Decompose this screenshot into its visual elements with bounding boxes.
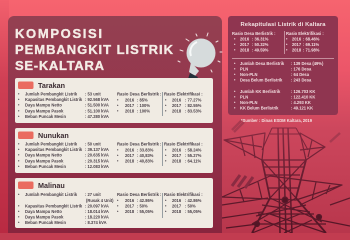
- text block: Tarakan village ratio: Rasio Desa Berlistrik :: [117, 92, 161, 96]
- text block: Tarakan electrification ratio: : 82.55%: [185, 103, 202, 108]
- text block: recap villages: Non-PLN: [240, 72, 258, 77]
- text block: recap village ratio: : 36.31%: [252, 36, 269, 42]
- text block: Tarakan stats: Daya Mampu Netto: [25, 103, 62, 108]
- panel: Malinau: [15, 178, 213, 228]
- text block: Nunukan village ratio: 2016: [125, 148, 135, 152]
- text block: Malinau stats: Daya Mampu Pasok: [25, 214, 64, 220]
- text block: Nunukan stats: : 50 unit: [85, 142, 101, 146]
- text block: Nunukan stats: : 20.315 kVA: [85, 158, 109, 163]
- text block: recap households: •: [234, 94, 236, 100]
- text block: Malinau electrification ratio: 2016: [172, 198, 182, 203]
- text block: Tarakan stats: : 51.100 kVA: [85, 108, 109, 113]
- text block: Malinau village ratio: : 55,05%: [137, 209, 154, 214]
- text block: Malinau stats: (Rusak 4 Unit): [86, 198, 114, 203]
- text block: Tarakan village ratio: 2018: [125, 108, 135, 114]
- text block: Malinau village ratio: •: [117, 204, 119, 208]
- text block: Tarakan stats: Beban Puncak Mesin: [25, 114, 66, 119]
- text block: Nunukan stats: Kapasitas Pembangkit Listrik: [25, 147, 83, 152]
- text block: Nunukan electrification ratio: Rasio Elektrifikasi :: [164, 142, 203, 146]
- text block: recap electrification ratio: Rasio Elektrifikasi :: [286, 31, 324, 36]
- text block: recap households: Jumlah KK Berlistrik: [240, 89, 281, 94]
- text block: recap electrification ratio: [286, 31, 324, 52]
- icon: Malinau badge: [18, 182, 34, 189]
- text block: Nunukan village ratio: : 33.83%: [137, 148, 154, 152]
- icon: Tarakan badge: [18, 82, 34, 89]
- text block: recap villages: : 64 Desa: [291, 72, 310, 77]
- text block: Malinau stats: : 20.097 kVA: [85, 204, 109, 208]
- title: PEMBANGKIT LISTRIK: [15, 42, 174, 57]
- text block: Tarakan stats: •: [18, 114, 20, 119]
- text block: recap villages: •: [234, 72, 236, 77]
- text block: Tarakan electrification ratio: 2016: [172, 98, 182, 102]
- text block: Nunukan village ratio: [117, 142, 161, 164]
- text block: recap village ratio: •: [234, 48, 236, 52]
- text block: Tarakan electrification ratio: •: [165, 103, 167, 108]
- text block: Malinau village ratio: : 42.86%: [137, 198, 154, 203]
- text block: Tarakan stats: : 92.568 kVA: [85, 97, 109, 102]
- text block: recap villages: Jumlah Desa Berlistrik: [240, 61, 285, 66]
- text block: recap villages: PLN: [240, 66, 248, 72]
- text block: Nunukan stats: : 12.083 kVA: [85, 164, 109, 169]
- panel: Tarakan: [15, 78, 213, 123]
- text block: Nunukan village ratio: •: [117, 158, 119, 164]
- panel: recap: [228, 16, 338, 115]
- heading: Nunukan: Nunukan: [38, 131, 69, 140]
- text block: Malinau stats: : 27 unit: [85, 192, 101, 197]
- text block: Nunukan village ratio: •: [117, 153, 119, 158]
- text block: recap electrification ratio: 2018: [292, 48, 302, 52]
- text block: Nunukan village ratio: 2018: [125, 158, 135, 164]
- text block: Nunukan stats: Jumlah Pembangkit Listrik: [25, 142, 78, 146]
- text block: Malinau stats: [18, 192, 114, 225]
- text block: Nunukan village ratio: 2017: [125, 153, 135, 158]
- text block: Nunukan electrification ratio: 2016: [172, 148, 182, 152]
- text block: recap households: KK Belum Berlistrik: [240, 106, 279, 110]
- text block: Malinau stats: •: [18, 192, 20, 197]
- text block: Nunukan village ratio: Rasio Desa Berlistrik :: [117, 142, 161, 146]
- text block: recap electrification ratio: : 69.11%: [303, 42, 320, 47]
- text block: Malinau village ratio: 2017: [125, 204, 135, 208]
- heading: Tarakan: Tarakan: [38, 81, 65, 90]
- title: SE-KALTARA: [15, 58, 105, 73]
- text block: recap villages: : 139 Desa (49%): [291, 61, 324, 66]
- text block: recap electrification ratio: : 68.46%: [303, 36, 320, 42]
- text block: Nunukan stats: •: [18, 147, 20, 152]
- text block: Malinau stats: : 8.374 kVA: [85, 220, 107, 225]
- text block: Tarakan stats: Kapasitas Pembangkit Listrik: [25, 97, 83, 102]
- text block: Malinau village ratio: : 50%: [137, 204, 148, 208]
- text block: Nunukan electrification ratio: : 55.27%: [185, 153, 202, 158]
- text block: Tarakan stats: [18, 92, 109, 119]
- text block: Nunukan electrification ratio: 2017: [172, 153, 182, 158]
- text block: Tarakan village ratio: : 100%: [137, 103, 150, 108]
- text block: recap households: : 126.703 KK: [291, 89, 315, 94]
- text block: Nunukan stats: Daya Mampu Netto: [25, 153, 62, 158]
- text block: Nunukan stats: Beban Puncak Mesin: [25, 164, 66, 169]
- text block: Malinau village ratio: Rasio Desa Berlistrik :: [117, 192, 161, 197]
- heading: recap: Rekapitulasi Listrik di Kaltara: [240, 22, 326, 28]
- text block: Malinau electrification ratio: 2017: [172, 204, 182, 208]
- text block: Malinau stats: Kapasitas Pembangkit Listrik: [25, 204, 83, 208]
- text block: recap electrification ratio: : 71.98%: [303, 48, 320, 52]
- text block: Tarakan village ratio: 2017: [125, 103, 135, 108]
- text block: Nunukan stats: •: [18, 158, 20, 163]
- text block: Tarakan stats: •: [18, 103, 20, 108]
- text block: recap households: •: [234, 100, 236, 105]
- text block: recap villages: [234, 61, 324, 82]
- text block: Malinau village ratio: 2016: [125, 198, 135, 203]
- title: KOMPOSISI: [15, 26, 102, 41]
- text block: Malinau electrification ratio: [164, 192, 203, 214]
- text block: recap households: PLN: [240, 94, 248, 100]
- text block: Nunukan electrification ratio: •: [165, 153, 167, 158]
- text block: recap households: Non-PLN: [240, 100, 258, 105]
- text block: Tarakan village ratio: : 100%: [137, 108, 150, 114]
- text block: Tarakan electrification ratio: 2018: [172, 108, 182, 114]
- text block: Nunukan village ratio: •: [117, 148, 119, 152]
- text block: Malinau stats: •: [18, 220, 20, 225]
- text block: recap households: [234, 89, 315, 110]
- text block: Nunukan stats: : 20.635 kVA: [85, 153, 109, 158]
- text block: recap electrification ratio: 2017: [292, 42, 302, 47]
- text block: recap households: •: [234, 106, 236, 110]
- text block: Tarakan electrification ratio: Rasio Elektrifikasi :: [164, 92, 203, 96]
- text block: recap households: : 122.410 KK: [291, 94, 315, 100]
- text block: recap village ratio: 2017: [240, 42, 250, 47]
- text block: Nunukan stats: •: [18, 164, 20, 169]
- text block: recap village ratio: : 50.32%: [252, 42, 269, 47]
- text block: Malinau electrification ratio: •: [165, 198, 167, 203]
- text block: Malinau electrification ratio: : 55,05%: [185, 209, 202, 214]
- text block: Malinau stats: Daya Mampu Netto: [25, 209, 62, 214]
- text block: Malinau electrification ratio: •: [165, 209, 167, 214]
- text block: Tarakan village ratio: •: [117, 108, 119, 114]
- text block: Tarakan stats: •: [18, 92, 20, 96]
- text block: Tarakan village ratio: •: [117, 103, 119, 108]
- panel: Nunukan: [15, 128, 213, 173]
- text block: recap village ratio: : 49.59%: [252, 48, 269, 52]
- text block: Nunukan electrification ratio: : 58.24%: [185, 148, 202, 152]
- text block: recap electrification ratio: •: [286, 48, 288, 52]
- text block: Nunukan village ratio: : 40,83%: [137, 158, 154, 164]
- text block: Nunukan stats: [18, 142, 109, 169]
- text block: Tarakan village ratio: : 85%: [137, 98, 148, 102]
- text block: recap villages: •: [234, 61, 236, 66]
- text block: Nunukan electrification ratio: •: [165, 148, 167, 152]
- text block: recap electrification ratio: •: [286, 36, 288, 42]
- panel: main composition: [8, 16, 222, 240]
- text block: Malinau electrification ratio: : 50%: [185, 204, 196, 208]
- text block: Malinau stats: : 18.220 kVA: [85, 214, 109, 220]
- text block: Nunukan electrification ratio: : 64.11%: [185, 158, 202, 164]
- text block: Nunukan village ratio: : 40,83%: [137, 153, 154, 158]
- text block: Malinau stats: •: [18, 209, 20, 214]
- text block: recap villages: •: [234, 78, 236, 82]
- text block: Tarakan electrification ratio: •: [165, 108, 167, 114]
- text block: Nunukan stats: •: [18, 142, 20, 146]
- text block: recap electrification ratio: •: [286, 42, 288, 47]
- text block: Tarakan stats: •: [18, 97, 20, 102]
- text block: Nunukan electrification ratio: [164, 142, 203, 164]
- text block: recap households: : 49.121 KK: [291, 106, 313, 110]
- text block: Nunukan electrification ratio: •: [165, 158, 167, 164]
- source note: *Sumber : Dinas ESDM Kaltara, 2019: [241, 118, 313, 123]
- text block: Tarakan electrification ratio: •: [165, 98, 167, 102]
- text block: recap electrification ratio: 2016: [292, 36, 302, 42]
- text block: Malinau village ratio: [117, 192, 161, 214]
- heading: Malinau: Malinau: [38, 181, 65, 190]
- text block: recap village ratio: •: [234, 36, 236, 42]
- text block: Tarakan village ratio: [117, 92, 161, 114]
- text block: Malinau electrification ratio: •: [165, 204, 167, 208]
- text block: Tarakan stats: Jumlah Pembangkit Listrik: [25, 92, 78, 96]
- text block: Nunukan stats: Daya Mampu Pasok: [25, 158, 64, 163]
- text block: recap village ratio: [232, 31, 275, 52]
- text block: Malinau stats: : 18.014 kVA: [85, 209, 109, 214]
- text block: Malinau electrification ratio: : 42.86%: [185, 198, 202, 203]
- text block: Tarakan stats: Daya Mampu Pasok: [25, 108, 64, 113]
- text block: recap village ratio: 2016: [240, 36, 250, 42]
- text block: Tarakan stats: : 51.500 kVA: [85, 103, 109, 108]
- text block: recap village ratio: •: [234, 42, 236, 47]
- text block: Nunukan stats: : 39.137 kVA: [85, 147, 109, 152]
- text block: Malinau stats: Beban Puncak Mesin: [25, 220, 66, 225]
- text block: Malinau village ratio: •: [117, 209, 119, 214]
- text block: Tarakan electrification ratio: [164, 92, 203, 114]
- text block: recap villages: Desa Belum Berlistrik: [240, 78, 283, 82]
- text block: Malinau electrification ratio: 2018: [172, 209, 182, 214]
- text block: Malinau stats: •: [18, 214, 20, 220]
- text block: Nunukan electrification ratio: 2018: [172, 158, 182, 164]
- text block: Malinau stats: •: [18, 204, 20, 208]
- icon: Nunukan badge: [18, 132, 34, 139]
- text block: recap households: : 4.293 KK: [291, 100, 311, 105]
- text block: Malinau village ratio: •: [117, 198, 119, 203]
- icon: transmission tower: [222, 120, 350, 233]
- text block: Tarakan electrification ratio: : 77.27%: [185, 98, 202, 102]
- text block: recap villages: : 176 Desa: [291, 66, 312, 72]
- title: [15, 26, 174, 73]
- text block: recap villages: •: [234, 66, 236, 72]
- text block: Tarakan electrification ratio: : 83.53%: [185, 108, 202, 114]
- text block: Tarakan village ratio: 2016: [125, 98, 135, 102]
- text block: Nunukan stats: •: [18, 153, 20, 158]
- text block: Tarakan village ratio: •: [117, 98, 119, 102]
- text block: Tarakan stats: •: [18, 108, 20, 113]
- text block: recap village ratio: Rasio Desa Berlistrik :: [232, 31, 275, 36]
- text block: Tarakan stats: : 47.280 kVA: [85, 114, 109, 119]
- text block: Malinau stats: Jumlah Pembangkit Listrik: [25, 192, 78, 197]
- icon: light bulb: [178, 33, 222, 82]
- text block: Malinau village ratio: 2018: [125, 209, 135, 214]
- text block: Tarakan electrification ratio: 2017: [172, 103, 182, 108]
- text block: recap villages: : 243 Desa: [291, 78, 312, 82]
- text block: Malinau electrification ratio: Rasio Elektrifikasi :: [164, 192, 203, 197]
- text block: recap village ratio: 2018: [240, 48, 250, 52]
- text block: recap households: •: [234, 89, 236, 94]
- text block: Tarakan stats: : 53 unit: [85, 92, 101, 96]
